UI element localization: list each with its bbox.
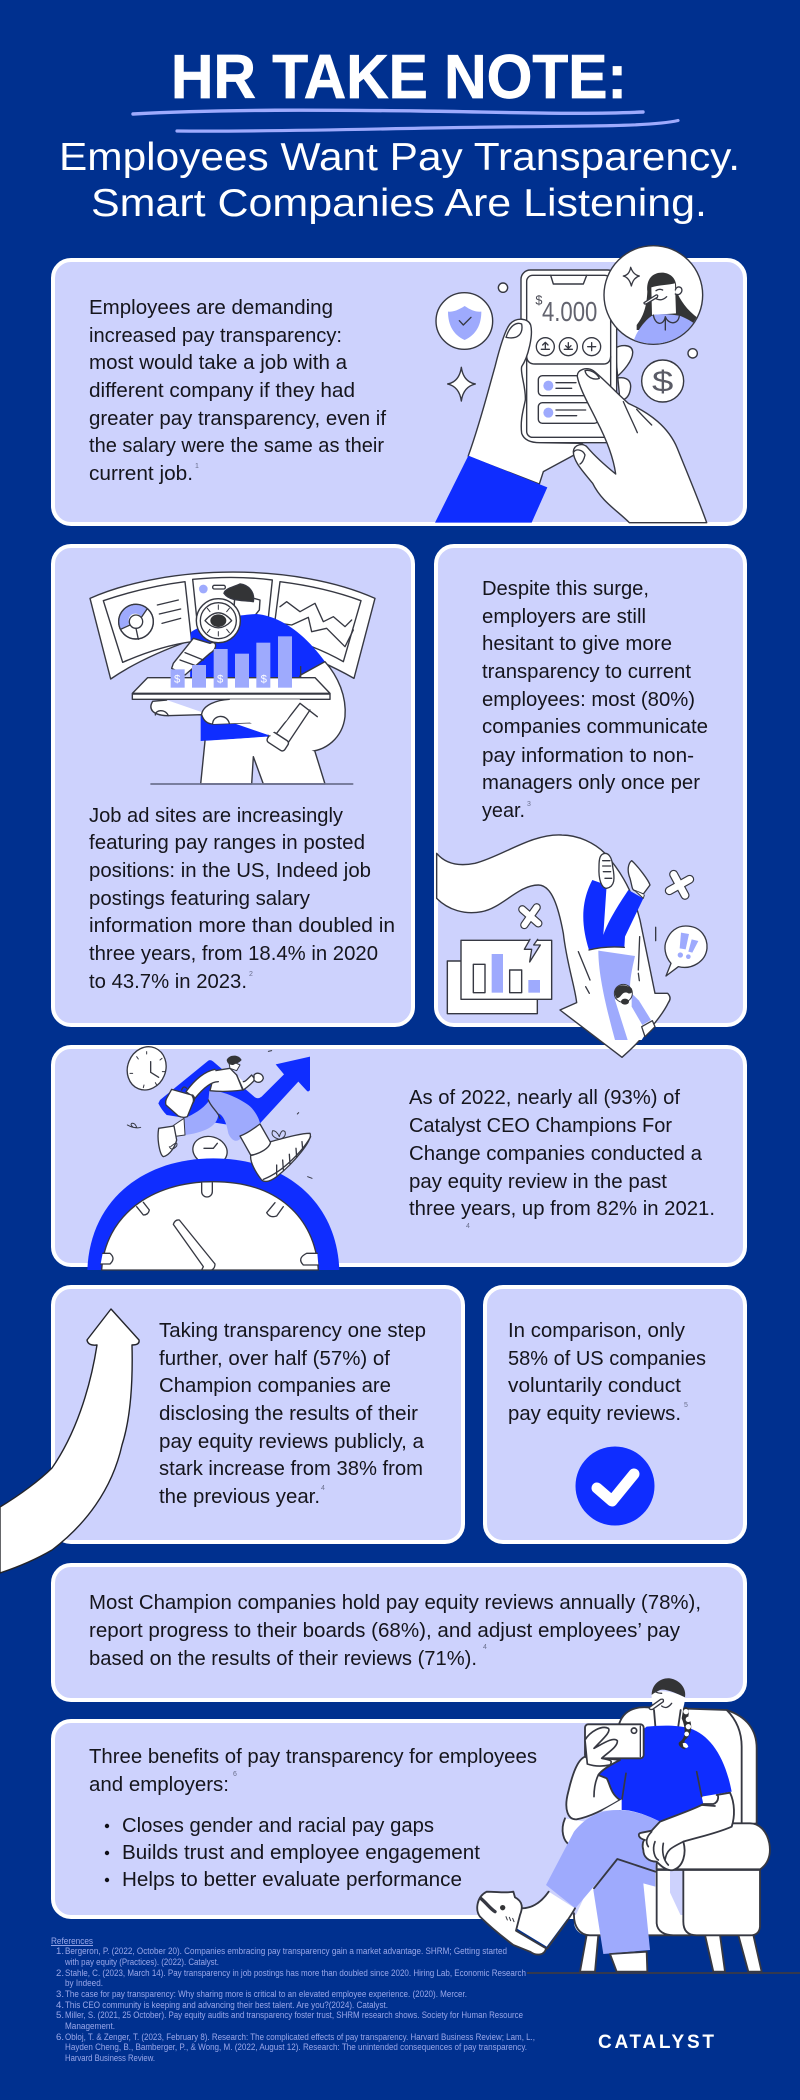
panel: employers hesitant: transparency to current bbox=[482, 661, 691, 683]
illustration: person inspecting data: $ bbox=[217, 673, 224, 685]
panel: disclosing results publicly: Champion companies are bbox=[159, 1375, 391, 1397]
panel: employers hesitant: employers are still bbox=[482, 606, 646, 628]
references: 1. bbox=[56, 1946, 64, 1957]
illustration: hands holding phone: $ bbox=[652, 366, 673, 399]
panel: job ad sites: Job ad sites are increasingly bbox=[89, 805, 343, 827]
panel: employers hesitant bbox=[436, 546, 745, 1025]
panel: job ad sites: information more than doubled in bbox=[89, 915, 395, 937]
panel: disclosing results publicly: 4 bbox=[321, 1485, 325, 1492]
panel: annual reviews: 4 bbox=[483, 1644, 487, 1651]
references: The case for pay transparency: Why sharing more is critical to an elevated employee experience. (2020). Mercer. bbox=[65, 1989, 467, 2000]
panel: three benefits: Builds trust and employee engagement bbox=[122, 1842, 480, 1864]
icon: check badge bbox=[576, 1446, 654, 1526]
references: with pay equity (Practices). (2022). Catalyst. bbox=[64, 1957, 219, 1968]
title bbox=[133, 43, 678, 131]
panel: disclosing results publicly: the previous year. bbox=[159, 1486, 320, 1508]
panel: annual reviews bbox=[53, 1565, 745, 1700]
panel: employees demanding transparency: current job. bbox=[89, 463, 193, 485]
illustration: person inspecting data: $ bbox=[261, 673, 268, 685]
panel: 58 percent of US companies bbox=[485, 1287, 745, 1542]
panel: 93 percent pay equity review: As of 2022, nearly all (93%) of bbox=[409, 1087, 680, 1109]
panel: employees demanding transparency: 1 bbox=[195, 463, 199, 470]
illustration: woman in armchair bbox=[477, 1678, 770, 1972]
panel: job ad sites: to 43.7% in 2023. bbox=[89, 971, 247, 993]
panel: employees demanding transparency: greater pay transparency, even if bbox=[89, 408, 386, 430]
panel: employers hesitant: pay information to non- bbox=[482, 745, 694, 767]
subtitle: Employees Want Pay Transparency. bbox=[59, 136, 740, 179]
illustration: hands holding phone bbox=[435, 246, 707, 523]
references: References bbox=[51, 1936, 93, 1947]
panel: three benefits bbox=[53, 1721, 733, 1917]
panel: employers hesitant: employees: most (80%) bbox=[482, 689, 695, 711]
panel: disclosing results publicly: pay equity reviews publicly, a bbox=[159, 1431, 425, 1453]
panel: employers hesitant: hesitant to give more bbox=[482, 633, 672, 655]
references: Management. bbox=[65, 2021, 115, 2032]
panel: three benefits: 6 bbox=[233, 1771, 237, 1778]
panel: three benefits: Helps to better evaluate performance bbox=[122, 1869, 462, 1891]
logo: Catalyst: CATALYST bbox=[598, 2032, 714, 2053]
floor line bbox=[527, 1972, 800, 1974]
panel: annual reviews: based on the results of their reviews (71%). bbox=[89, 1648, 477, 1670]
references: This CEO community is keeping and advancing their best talent. Are you?(2024). Catalyst. bbox=[65, 2000, 388, 2011]
panel: employers hesitant: companies communicate bbox=[482, 716, 708, 738]
panel: 93 percent pay equity review: 4 bbox=[466, 1223, 470, 1230]
references: Miller, S. (2021, 25 October). Pay equity audits and transparency foster trust, SHRM research shows. Society for Human Resource bbox=[65, 2010, 523, 2021]
panel: 93 percent pay equity review: pay equity review in the past bbox=[409, 1171, 667, 1193]
references: 5. bbox=[56, 2010, 64, 2021]
panel: employees demanding transparency: the salary were the same as their bbox=[89, 435, 384, 457]
panel: 93 percent pay equity review: Catalyst CEO Champions For bbox=[409, 1115, 672, 1137]
panel: job ad sites: three years, from 18.4% in 2020 bbox=[89, 943, 378, 965]
panel: annual reviews: report progress to their boards (68%), and adjust employees’ pay bbox=[89, 1620, 680, 1642]
panel: three benefits: Closes gender and racial pay gaps bbox=[122, 1815, 434, 1837]
illustration: hands holding phone: 4.000 bbox=[542, 296, 597, 327]
panel: job ad sites: postings featuring salary bbox=[89, 888, 310, 910]
panel: employees demanding transparency: most would take a job with a bbox=[89, 352, 348, 374]
panel: disclosing results publicly: Taking transparency one step bbox=[159, 1320, 426, 1342]
references bbox=[51, 1936, 535, 2064]
panel: employers hesitant: Despite this surge, bbox=[482, 578, 649, 600]
references: Harvard Business Review. bbox=[65, 2053, 155, 2064]
panel: 58 percent of US companies: voluntarily conduct bbox=[508, 1375, 681, 1397]
illustration: person falling on down arrow bbox=[437, 835, 707, 1057]
panel: 93 percent pay equity review: three years, up from 82% in 2021. bbox=[409, 1198, 715, 1220]
panel: employees demanding transparency: Employees are demanding bbox=[89, 297, 333, 319]
illustration: person inspecting data: $ bbox=[174, 673, 181, 685]
references: 2. bbox=[56, 1968, 64, 1979]
panel: three benefits: Three benefits of pay transparency for employees bbox=[89, 1746, 537, 1768]
panel: three benefits: and employers: bbox=[89, 1774, 229, 1796]
illustration: hands holding phone: $ bbox=[535, 293, 542, 307]
panel: employees demanding transparency: different company if they had bbox=[89, 380, 355, 402]
references: by Indeed. bbox=[65, 1978, 103, 1989]
panel: employers hesitant: year. bbox=[482, 800, 525, 822]
references: Bergeron, P. (2022, October 20). Companies embracing pay transparency gain a market advantage. SHRM; Getting started bbox=[65, 1946, 507, 1957]
panel: employees demanding transparency bbox=[53, 260, 745, 524]
panel: 58 percent of US companies: pay equity reviews. bbox=[508, 1403, 681, 1425]
title: HR TAKE NOTE: bbox=[171, 43, 627, 112]
panel: 58 percent of US companies: 5 bbox=[684, 1402, 688, 1409]
panel: disclosing results publicly: stark increase from 38% from bbox=[159, 1458, 423, 1480]
panel: 58 percent of US companies: 58% of US companies bbox=[508, 1348, 706, 1370]
panel: disclosing results publicly bbox=[53, 1287, 463, 1542]
panel: disclosing results publicly: disclosing the results of their bbox=[159, 1403, 418, 1425]
illustration: upward white arrow bbox=[0, 1309, 139, 1573]
references: Hayden Cheng, B., Bamberger, P., & Wong, M. (2022, August 12). Research: The unintended consequences of pay transparency. bbox=[65, 2042, 527, 2053]
references: Stahle, C. (2023, March 14). Pay transparency in job postings has more than doubled since 2020. Hiring Lab, Economic Research bbox=[65, 1968, 526, 1979]
panel: 93 percent pay equity review bbox=[53, 1047, 745, 1265]
panel: annual reviews: Most Champion companies hold pay equity reviews annually (78%), bbox=[89, 1592, 701, 1614]
references: 6. bbox=[56, 2032, 64, 2043]
panel: employers hesitant: 3 bbox=[527, 801, 531, 808]
panel: employers hesitant: managers only once per bbox=[482, 772, 700, 794]
references: 3. bbox=[56, 1989, 64, 2000]
panel: job ad sites: 2 bbox=[249, 971, 253, 978]
panel: job ad sites: featuring pay ranges in posted bbox=[89, 832, 365, 854]
panel: employees demanding transparency: increased pay transparency: bbox=[89, 325, 342, 347]
panel: disclosing results publicly: further, over half (57%) of bbox=[159, 1348, 390, 1370]
subtitle: Smart Companies Are Listening. bbox=[91, 182, 707, 225]
references: 4. bbox=[56, 2000, 64, 2011]
panel: job ad sites: positions: in the US, Indeed job bbox=[89, 860, 371, 882]
panel: 93 percent pay equity review: Change companies conducted a bbox=[409, 1143, 703, 1165]
panel: 58 percent of US companies: In comparison, only bbox=[508, 1320, 685, 1342]
references: Obloj, T. & Zenger, T. (2023, February 8). Research: The complicated effects of pay transparency. Harvard Business Review; Lam, L., bbox=[65, 2032, 535, 2043]
subtitle bbox=[59, 136, 740, 225]
illustration: person running on clock bbox=[87, 1041, 339, 1270]
illustration: person inspecting data bbox=[90, 572, 375, 784]
panel: job ad sites bbox=[53, 546, 413, 1025]
